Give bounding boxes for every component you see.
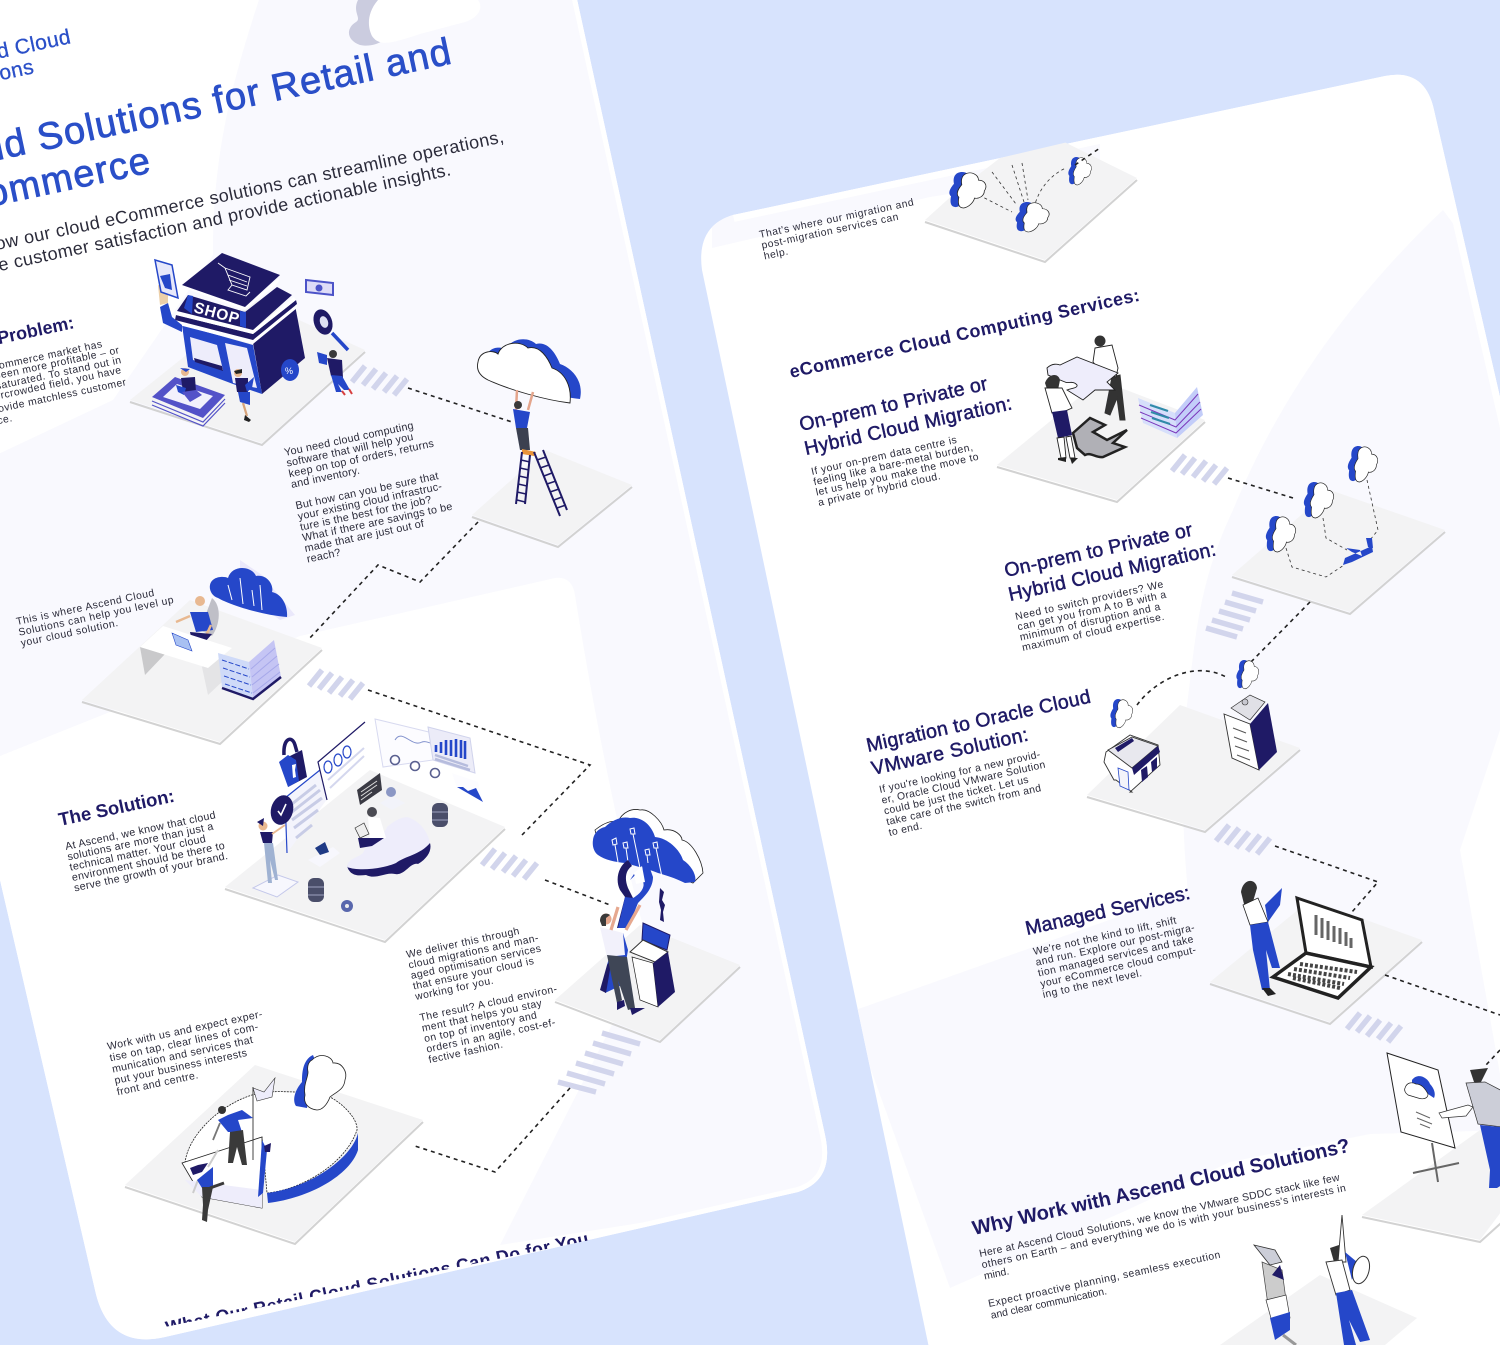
heading: on-prem to private or hybrid (1): Hybrid Cloud Migration: bbox=[802, 393, 1014, 460]
plate bbox=[997, 380, 1205, 502]
cloud on disc bbox=[294, 1055, 346, 1110]
heading: what our retail cloud solutions (cut off): What Our Retail Cloud Solutions Can Do for You bbox=[164, 1229, 590, 1338]
decorative cloud at the top of the sheet bbox=[349, 0, 480, 46]
text: we deliver this through: We deliver this through bbox=[405, 926, 521, 961]
small building bbox=[1104, 735, 1160, 792]
man with megaphone bbox=[1326, 1215, 1372, 1345]
heading: the solution: The Solution: bbox=[56, 785, 176, 830]
destination cloud bbox=[1343, 538, 1373, 565]
panel: services infographic sheet bbox=[701, 75, 1500, 1345]
text: solution paragraph: solutions are more than just a bbox=[66, 821, 215, 863]
clouds bbox=[949, 157, 1091, 232]
text: on-prem paragraph: If your on-prem data centre is bbox=[810, 435, 958, 478]
text: you need cloud software: But how can you be sure that bbox=[294, 470, 440, 512]
text: you need cloud software: reach? bbox=[306, 547, 342, 566]
text: need to switch providers: minimum of disruption and a bbox=[1019, 602, 1162, 644]
phone and arm bbox=[155, 260, 182, 332]
person bbox=[600, 905, 645, 1015]
panel: retail infographic sheet bbox=[0, 0, 850, 1339]
magnifier icon bbox=[310, 307, 348, 350]
connector fragment: clouds network bbox=[1075, 148, 1100, 165]
illustration: two people with megaphone bbox=[1220, 1215, 1417, 1345]
text: you need cloud software: ture is the best for the job? bbox=[299, 494, 433, 534]
illustration: person at desk with server bbox=[82, 560, 322, 744]
text: managed services paragraph: your eCommerce cloud comput- bbox=[1039, 945, 1198, 990]
text: need to switch providers: Need to switch providers? We bbox=[1014, 579, 1165, 623]
man bbox=[1093, 336, 1125, 420]
server stack bbox=[218, 640, 281, 699]
text: need to switch providers bbox=[1014, 579, 1172, 654]
desk bbox=[140, 626, 232, 695]
laptop bbox=[1273, 898, 1371, 998]
chat bubble bbox=[357, 773, 382, 805]
plate bbox=[472, 450, 632, 547]
banknote mat with seated person bbox=[152, 368, 225, 426]
heading: on-prem to private or hybrid (1): On-prem to Private or bbox=[797, 373, 990, 436]
pie disc bbox=[182, 1092, 358, 1208]
text: why paragraph two: and clear communication. bbox=[990, 1286, 1108, 1322]
text: solution paragraph: technical matter. Your cloud bbox=[69, 833, 207, 874]
person bbox=[176, 596, 219, 642]
text: managed services paragraph bbox=[1032, 912, 1203, 1001]
blue circuit cloud bbox=[210, 560, 295, 620]
striped path: clouds bbox=[1206, 593, 1263, 637]
striped path: puzzle bbox=[1172, 455, 1227, 484]
heading: migration to oracle cloud: VMware Solution: bbox=[869, 724, 1030, 780]
illustration: person fixing cloud with wrench bbox=[555, 810, 740, 1042]
woman bbox=[1045, 375, 1078, 464]
striped path: wrench bbox=[558, 1033, 640, 1092]
woman bbox=[1241, 881, 1282, 996]
text: solution paragraph: environment should be there to bbox=[71, 840, 226, 884]
illustration: presenter with board bbox=[1362, 1053, 1500, 1242]
text: we deliver this through bbox=[404, 921, 567, 1066]
text: need to switch providers: can get you from A to B with a bbox=[1017, 590, 1168, 633]
text: need to switch providers: maximum of cloud expertise. bbox=[1021, 612, 1166, 654]
heading: on-prem to private or hybrid (2): On-prem to Private or bbox=[1002, 519, 1195, 582]
tower bbox=[1224, 695, 1277, 770]
text: that's where our migration: post-migration services can bbox=[761, 212, 900, 252]
building: % bbox=[285, 366, 293, 376]
connector: desk to solution bbox=[368, 690, 590, 835]
plate bbox=[1210, 900, 1422, 1024]
text: you need cloud software: your existing cloud infrastruc- bbox=[297, 481, 443, 523]
text: oracle paragraph: take care of the switch from and bbox=[885, 783, 1043, 828]
text: managed services paragraph: ing to the next level. bbox=[1042, 968, 1143, 1001]
text: you need cloud software: keep on top of orders, returns bbox=[288, 438, 436, 480]
illustration: clouds migration bbox=[1232, 446, 1445, 614]
clouds bbox=[1110, 660, 1259, 728]
heading: on-prem to private or hybrid (2): Hybrid Cloud Migration: bbox=[1006, 539, 1218, 606]
text: why paragraph one: mind. bbox=[983, 1266, 1010, 1282]
text: oracle paragraph: er, Oracle Cloud VMware Solution bbox=[881, 760, 1047, 807]
text: work with us: Work with us and expect exper- bbox=[106, 1008, 264, 1053]
text: we deliver this through: that ensure your cloud is bbox=[412, 956, 535, 992]
arc connector bbox=[1137, 671, 1226, 705]
text: you need cloud software: made that are just out of bbox=[304, 518, 426, 555]
text: oracle paragraph: to end. bbox=[888, 821, 924, 839]
illustration: person on a ladder holding a cloud bbox=[472, 339, 632, 547]
striped path: laptop bbox=[1347, 1013, 1401, 1042]
text: managed services paragraph: tion managed services and take bbox=[1037, 934, 1195, 979]
plate bbox=[82, 600, 322, 744]
woman presenting bbox=[253, 818, 298, 897]
striped path: oracle bbox=[1216, 825, 1270, 854]
ladder bbox=[516, 450, 567, 516]
barrels and gears bbox=[308, 787, 448, 912]
man bbox=[1439, 1068, 1500, 1188]
text: we deliver this through: fective fashion. bbox=[428, 1040, 504, 1066]
connector: wrench to pie bbox=[415, 1088, 570, 1172]
text: solution paragraph bbox=[64, 809, 229, 894]
connector: laptop to presenter bbox=[1385, 975, 1500, 1015]
connector: solution to wrench bbox=[545, 880, 610, 905]
text: solution paragraph: At Ascend, we know that cloud bbox=[64, 809, 217, 853]
plate bbox=[924, 142, 1138, 263]
text: this is where ascend cloud: Solutions can help you level up bbox=[18, 595, 175, 639]
text: why paragraph one: Here at Ascend Cloud Solutions, we know the VMware SDDC stack like few bbox=[978, 1173, 1341, 1260]
text: work with us bbox=[106, 1008, 274, 1098]
climbing people bbox=[190, 1106, 253, 1222]
connector: shop to ladder bbox=[408, 388, 512, 422]
flag bbox=[253, 1078, 275, 1160]
heading: managed services: Managed Services: bbox=[1023, 882, 1192, 940]
building: SHOP bbox=[192, 299, 241, 328]
text: oracle paragraph: could be just the ticket. Let us bbox=[883, 775, 1030, 817]
standing person with laptop bbox=[234, 369, 254, 422]
text: you need cloud software: What if there are savings to be bbox=[301, 501, 454, 544]
plate bbox=[1220, 1275, 1417, 1345]
text: oracle paragraph: If you're looking for a new provid- bbox=[878, 749, 1042, 796]
migration routes bbox=[1286, 480, 1378, 577]
illustration: woman with laptop bbox=[1210, 881, 1422, 1024]
text: we deliver this through: ment that helps you stay bbox=[421, 998, 544, 1035]
cloud bbox=[477, 339, 581, 403]
text: oracle paragraph bbox=[878, 749, 1054, 839]
text: problem paragraph bbox=[0, 339, 128, 432]
banknote icon bbox=[306, 280, 333, 295]
connector: puzzle to clouds bbox=[1228, 478, 1293, 498]
text: we deliver this through: cloud migrations and man- bbox=[408, 933, 540, 971]
plate bbox=[225, 770, 505, 942]
plate bbox=[1362, 1130, 1500, 1242]
illustration: puzzle team bbox=[997, 336, 1205, 502]
server stack bbox=[1138, 387, 1203, 438]
striped path: shop bbox=[352, 366, 407, 395]
text: this is where ascend cloud bbox=[15, 584, 177, 649]
plate bbox=[1087, 705, 1300, 832]
text: we deliver this through: working for you. bbox=[413, 976, 495, 1003]
text: work with us: front and centre. bbox=[116, 1069, 200, 1098]
kiosk bbox=[630, 923, 675, 1007]
connector: oracle to laptop bbox=[1275, 846, 1378, 920]
heading: ecommerce cloud computing services: eCommerce Cloud Computing Services: bbox=[788, 285, 1141, 382]
text: this is where ascend cloud: This is where Ascend Cloud bbox=[15, 588, 156, 628]
clouds bbox=[1266, 446, 1378, 552]
circuit cloud bbox=[593, 810, 703, 883]
woman bbox=[1254, 1245, 1296, 1345]
shopper bbox=[317, 350, 352, 395]
plate bbox=[130, 300, 365, 445]
illustration: team on a pie chart bbox=[125, 1055, 423, 1244]
plate bbox=[125, 1065, 423, 1244]
text: we deliver this through: aged optimisation services bbox=[410, 943, 543, 982]
lavender puzzle piece bbox=[1047, 357, 1118, 400]
text: work with us: put your business interests bbox=[113, 1047, 248, 1087]
text: why paragraph one: others on Earth – and everything we do is with your business's interests in bbox=[981, 1183, 1347, 1271]
text: that's where our migration: That's where our migration and bbox=[758, 197, 915, 241]
text: on-prem paragraph bbox=[810, 431, 982, 509]
screens bbox=[285, 719, 483, 853]
grey puzzle piece bbox=[1073, 418, 1127, 457]
striped path: desk bbox=[309, 670, 363, 699]
wrench bbox=[600, 860, 665, 993]
plate bbox=[1232, 490, 1445, 614]
text: that's where our migration: help. bbox=[763, 246, 790, 262]
text: on-prem paragraph: a private or hybrid cloud. bbox=[817, 471, 942, 509]
text: work with us: tise on tap, clear lines of com- bbox=[109, 1021, 260, 1064]
text: we deliver this through: The result? A cloud environ- bbox=[419, 984, 559, 1024]
text: managed services paragraph: We're not the kind to lift, shift bbox=[1032, 915, 1178, 958]
connector: clouds to oracle bbox=[1248, 602, 1310, 665]
striped path: solution bbox=[482, 849, 537, 879]
text: you need cloud software: You need cloud computing bbox=[283, 420, 415, 459]
text: you need cloud software bbox=[283, 415, 458, 566]
connecting lines bbox=[963, 163, 1066, 212]
illustration: clouds network bbox=[924, 142, 1138, 263]
padlock icon bbox=[279, 739, 307, 787]
text: work with us: munication and services that bbox=[111, 1034, 254, 1076]
text: this is where ascend cloud: your cloud solution. bbox=[20, 618, 120, 649]
person bbox=[513, 390, 536, 456]
illustration: cloud workspace bbox=[225, 719, 505, 942]
text: you need cloud software: software that will help you bbox=[285, 431, 415, 470]
stand bbox=[1413, 1143, 1459, 1182]
connector fragment: presenter bbox=[1486, 1050, 1500, 1065]
plate bbox=[555, 925, 740, 1042]
cloud platform with person bbox=[347, 807, 430, 877]
text: we deliver this through: on top of inventory and bbox=[423, 1010, 538, 1045]
text: why paragraph two: Expect proactive planning, seamless execution bbox=[987, 1250, 1222, 1310]
text: we deliver this through: orders in an agile, cost-ef- bbox=[425, 1017, 557, 1056]
connector: ladder to desk bbox=[308, 522, 478, 640]
check badge bbox=[267, 793, 297, 827]
text: that's where our migration bbox=[758, 197, 920, 262]
heading: why work with ascend: Why Work with Ascend Cloud Solutions? bbox=[970, 1135, 1352, 1240]
illustration: oracle migration buildings bbox=[1087, 660, 1300, 832]
text: solution paragraph: serve the growth of your brand. bbox=[73, 850, 229, 894]
board bbox=[1387, 1053, 1455, 1148]
illustration: shop bbox=[130, 253, 365, 445]
text: managed services paragraph: and run. Explore our post-migra- bbox=[1035, 923, 1196, 969]
text: you need cloud software: and inventory. bbox=[290, 465, 361, 491]
text: on-prem paragraph: feeling like a bare-metal burden, bbox=[813, 442, 974, 488]
text: on-prem paragraph: let us help you make the move to bbox=[815, 452, 980, 499]
building bbox=[175, 253, 305, 394]
heading: migration to oracle cloud: Migration to Oracle Cloud bbox=[864, 686, 1093, 757]
